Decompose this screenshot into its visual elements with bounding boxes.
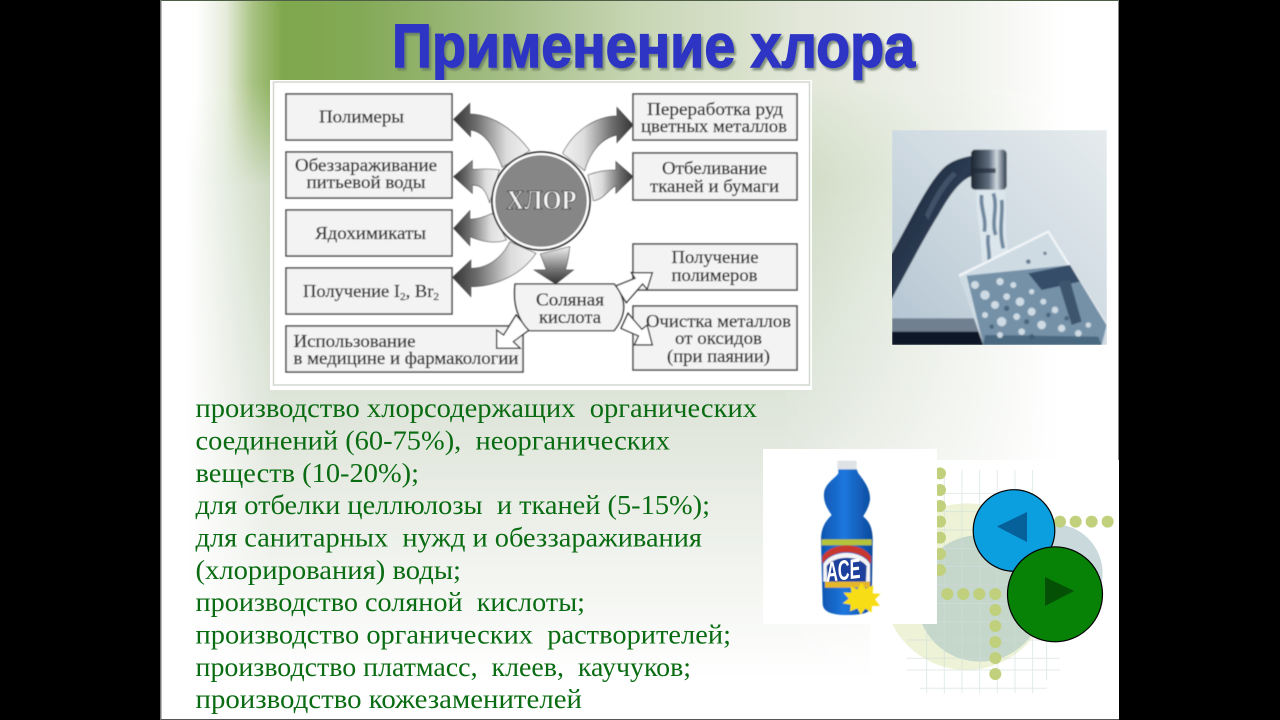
box: making polymers: Получение — [672, 247, 759, 267]
box: iodine and bromine: Получение I — [303, 281, 398, 301]
hydrochloric acid box with white arrows: Соляная — [536, 290, 604, 310]
chlorine uses diagram — [270, 80, 812, 390]
list of chlorine uses: производство соляной кислоты; — [196, 587, 585, 617]
box: bleaching: Отбеливание — [662, 158, 767, 178]
box: pesticides — [286, 210, 452, 256]
box: metal cleaning — [633, 306, 797, 370]
list of chlorine uses — [196, 393, 758, 714]
list of chlorine uses: производство органических растворителей; — [196, 620, 731, 650]
photo: ACE bleach bottle — [763, 449, 937, 624]
box: water disinfection: Обеззараживание — [295, 155, 437, 175]
arrows from chlorine — [452, 103, 633, 297]
title: Применение хлора — [392, 12, 916, 80]
box: iodine and bromine: 2 — [400, 291, 406, 303]
chlorine circle — [492, 152, 590, 250]
box: ore processing: Переработка руд — [647, 99, 783, 119]
chlorine circle: ХЛОР — [506, 185, 576, 215]
metal cleaning label: от оксидов — [675, 328, 762, 348]
metal cleaning label — [646, 311, 791, 367]
list of chlorine uses: для отбелки целлюлозы и тканей (5-15%); — [196, 490, 710, 520]
list of chlorine uses: производство кожезаменителей — [196, 684, 582, 714]
slide content — [160, 0, 1119, 720]
photo: water pouring into a glass — [888, 130, 1108, 345]
box: bleaching: тканей и бумаги — [650, 176, 779, 196]
box: ore processing: цветных металлов — [641, 116, 787, 136]
box: iodine and bromine: 2 — [433, 291, 439, 303]
metal cleaning label: Очистка металлов — [646, 311, 791, 331]
list of chlorine uses: (хлорирования) воды; — [196, 555, 461, 585]
photo: ACE bleach bottle: ACE — [823, 553, 863, 588]
box: iodine and bromine: , Br — [406, 281, 433, 301]
list of chlorine uses: соединений (60-75%), неорганических — [196, 426, 671, 456]
box: bleaching — [633, 153, 797, 200]
box: water disinfection: питьевой воды — [306, 172, 426, 192]
forward navigation button — [1008, 547, 1102, 642]
box: polymers — [286, 94, 452, 140]
list of chlorine uses: веществ (10-20%); — [196, 458, 419, 488]
box: pesticides: Ядохимикаты — [315, 223, 426, 243]
hydrochloric acid box with white arrows: кислота — [539, 307, 601, 327]
decorative ornament — [892, 460, 1114, 694]
hydrochloric acid box with white arrows — [497, 273, 652, 348]
box: polymers: Полимеры — [319, 106, 404, 126]
box: medicine: Использование — [294, 331, 416, 351]
box: medicine — [286, 326, 523, 372]
slide edges — [160, 0, 1119, 720]
box: making polymers — [633, 244, 797, 290]
list of chlorine uses: производство хлорсодержащих органических — [196, 393, 758, 423]
box: ore processing — [633, 94, 797, 140]
box: water disinfection — [286, 152, 452, 198]
box: medicine: в медицине и фармакологии — [294, 348, 519, 368]
slide background — [161, 0, 1119, 720]
back navigation button — [973, 490, 1055, 571]
metal cleaning label: (при паянии) — [667, 346, 770, 367]
list of chlorine uses: для санитарных нужд и обеззараживания — [196, 522, 702, 552]
box: making polymers: полимеров — [672, 265, 758, 285]
box: iodine and bromine — [286, 268, 452, 314]
list of chlorine uses: производство платмасс, клеев, каучуков; — [196, 652, 691, 682]
